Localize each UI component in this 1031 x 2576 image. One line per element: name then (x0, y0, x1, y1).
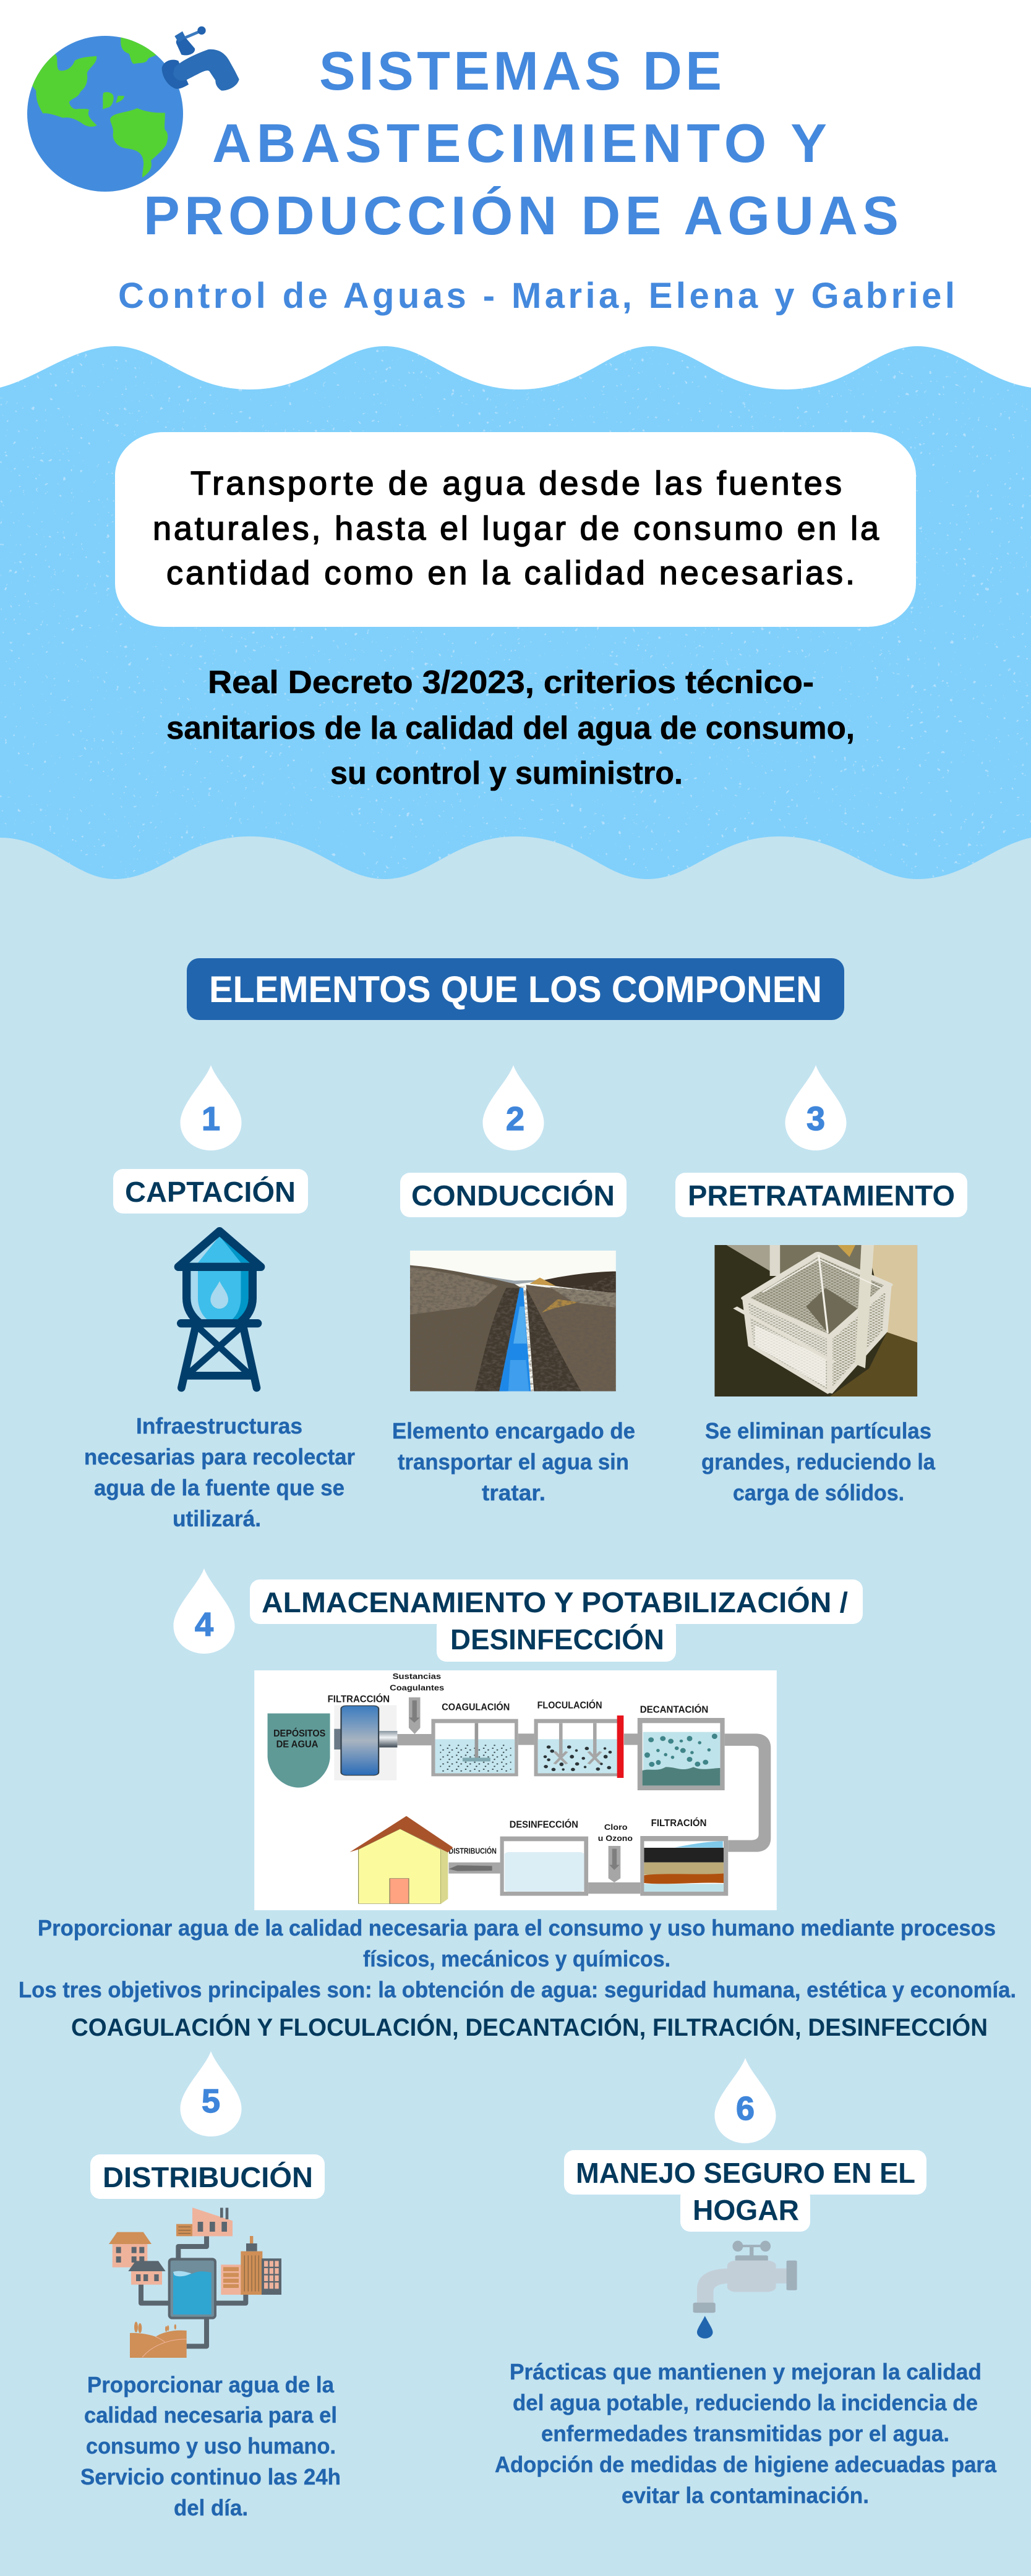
text: distribución description: Proporcionar agua de la (87, 2372, 335, 2397)
panel: definition callout: Transporte de agua desde las fuentes (190, 465, 842, 502)
text block: Real Decreto: su control y suministro. (330, 755, 683, 791)
text: manejo seguro description: Prácticas que mantienen y mejoran la calidad (510, 2359, 982, 2384)
icon: number drop 2: 2 (506, 1100, 524, 1137)
text: conducción description: tratar. (482, 1480, 545, 1505)
filter drum (328, 1693, 397, 1780)
panel: definition callout: naturales, hasta el lugar de consumo en la (153, 510, 879, 547)
label: distribución (90, 2154, 325, 2199)
photo: screening basket (714, 1245, 917, 1396)
text: manejo seguro description (495, 2359, 997, 2508)
label: conducción (400, 1173, 627, 1217)
text: almacenamiento description: Los tres objetivos principales son: la obtención de agua: seguridad humana, estética y economía. (19, 1977, 1016, 2002)
text: distribución description: Servicio continuo las 24h (80, 2464, 341, 2489)
diagram: water treatment process (254, 1670, 777, 1910)
title: PRODUCCIÓN DE AGUAS (143, 185, 899, 246)
label: almacenamiento y potabilización: DESINFECCIÓN (450, 1623, 664, 1656)
deposit tank (268, 1714, 330, 1788)
text: manejo seguro description: enfermedades transmitidas por el agua. (541, 2421, 949, 2446)
label: manejo seguro en el hogar (564, 2150, 926, 2232)
label: almacenamiento y potabilización: ALMACENAMIENTO Y POTABILIZACIÓN / (262, 1586, 848, 1618)
label: almacenamiento y potabilización (250, 1579, 863, 1662)
step 4: almacenamiento (19, 1568, 1016, 2041)
red barrier (617, 1715, 623, 1778)
distribution arrow (448, 1846, 497, 1871)
text block: Real Decreto: sanitarios de la calidad del agua de consumo, (166, 710, 855, 746)
text: pretratamiento description (701, 1418, 936, 1505)
coagulation tank: COAGULACIÓN (442, 1701, 510, 1712)
icon: number drop 2 (482, 1065, 544, 1150)
deposit tank: DE AGUA (276, 1740, 318, 1749)
subtitle: Control de Aguas - Maria, Elena y Gabriel (118, 276, 955, 316)
step 1: captación (84, 1065, 355, 1531)
text: conducción description: Elemento encargado de (392, 1418, 635, 1443)
text block: Real Decreto (166, 665, 855, 791)
house (350, 1816, 453, 1904)
text: process stages: COAGULACIÓN Y FLOCULACIÓN, DECANTACIÓN, FILTRACIÓN, DESINFECCIÓN (71, 2013, 988, 2041)
step 6: manejo seguro (495, 2058, 997, 2508)
label: captación (113, 1169, 308, 1214)
panel: blue wave band (0, 346, 1031, 927)
chlorine input: u Ozono (598, 1834, 633, 1843)
icon: water distribution network (109, 2208, 281, 2358)
icon: number drop 4: 4 (195, 1606, 213, 1643)
text: captación description: agua de la fuente que se (94, 1475, 344, 1500)
text: almacenamiento description: Proporcionar agua de la calidad necesaria para el consumo y uso humano mediante procesos (38, 1915, 996, 1941)
heading: elementos: ELEMENTOS QUE LOS COMPONEN (209, 969, 822, 1010)
decantation tank (638, 1704, 725, 1790)
coagulation tank (431, 1701, 518, 1776)
step 5: distribución (80, 2051, 341, 2520)
text: manejo seguro description: evitar la contaminación. (622, 2483, 869, 2508)
panel: light blue lower section (0, 836, 1031, 2576)
label: pretratamiento (675, 1173, 967, 1217)
text: captación description: necesarias para recolectar (84, 1444, 355, 1469)
icon: faucet with drop (693, 2241, 797, 2339)
icon: number drop 5 (181, 2051, 241, 2136)
distribution arrow: DISTRIBUCIÓN (448, 1846, 497, 1856)
label: manejo seguro en el hogar: MANEJO SEGURO EN EL (576, 2157, 915, 2189)
text: distribución description: calidad necesaria para el (84, 2402, 337, 2428)
icon: number drop 4 (173, 1568, 235, 1654)
text: distribución description: del día. (174, 2495, 248, 2520)
disinfection tank: DESINFECCIÓN (510, 1819, 578, 1830)
label: pretratamiento: PRETRATAMIENTO (688, 1180, 955, 1212)
label: captación: CAPTACIÓN (125, 1176, 296, 1208)
icon: number drop 1: 1 (202, 1100, 220, 1137)
heading: elementos (187, 958, 844, 1020)
title: ABASTECIMIENTO Y (212, 113, 827, 174)
text: pretratamiento description: carga de sólidos. (733, 1480, 904, 1505)
step 3: pretratamiento (675, 1065, 967, 1505)
flocculation tank: FLOCULACIÓN (537, 1699, 602, 1711)
text: distribución description (80, 2372, 341, 2520)
icon: number drop 6: 6 (736, 2090, 755, 2127)
text: almacenamiento description (19, 1915, 1016, 2002)
pipes (397, 1733, 771, 1894)
icon: number drop 5: 5 (202, 2083, 220, 2120)
decantation tank: DECANTACIÓN (640, 1704, 708, 1715)
text: distribución description: consumo y uso humano. (86, 2433, 336, 2459)
title: SISTEMAS DE (319, 40, 722, 101)
text: pretratamiento description: Se eliminan partículas (705, 1418, 931, 1443)
text: almacenamiento description: físicos, mecánicos y químicos. (363, 1946, 670, 1971)
icon: globe with faucet (27, 27, 239, 192)
text: manejo seguro description: del agua potable, reduciendo la incidencia de (513, 2390, 978, 2415)
filtration tank (640, 1817, 728, 1896)
chlorine input (598, 1822, 633, 1882)
filter drum: FILTRACCIÓN (328, 1693, 390, 1704)
flocculation tank (534, 1699, 618, 1776)
chlorine input: Cloro (604, 1822, 628, 1832)
text: conducción description (392, 1418, 635, 1505)
icon: number drop 3: 3 (806, 1100, 825, 1137)
text: captación description: Infraestructuras (136, 1413, 302, 1439)
text block: Real Decreto: Real Decreto 3/2023, criterios técnico- (208, 665, 814, 700)
icon: number drop 6 (715, 2058, 776, 2143)
text: captación description: utilizará. (173, 1506, 261, 1531)
step 2: conducción (392, 1065, 635, 1505)
coagulant input: Coagulantes (390, 1683, 444, 1692)
coagulant input (390, 1672, 444, 1734)
label: distribución: DISTRIBUCIÓN (103, 2161, 313, 2193)
deposit tank: DEPÓSITOS (273, 1728, 325, 1739)
text: pretratamiento description: grandes, reduciendo la (701, 1449, 936, 1474)
text: manejo seguro description: Adopción de medidas de higiene adecuadas para (495, 2452, 997, 2477)
disinfection tank (500, 1819, 588, 1896)
icon: water tower (178, 1231, 261, 1388)
label: manejo seguro en el hogar: HOGAR (693, 2194, 799, 2226)
text: conducción description: transportar el agua sin (398, 1449, 629, 1474)
coagulant input: Sustancias (393, 1672, 441, 1681)
photo: pipe in trench (410, 1251, 616, 1392)
icon: number drop 1 (181, 1065, 241, 1150)
panel: definition callout (115, 432, 916, 627)
filtration tank: FILTRACIÓN (651, 1817, 706, 1829)
icon: number drop 3 (785, 1065, 846, 1150)
panel: definition callout: cantidad como en la calidad necesarias. (166, 555, 855, 592)
title (143, 40, 899, 246)
label: conducción: CONDUCCIÓN (411, 1180, 615, 1212)
text: captación description (84, 1413, 355, 1531)
